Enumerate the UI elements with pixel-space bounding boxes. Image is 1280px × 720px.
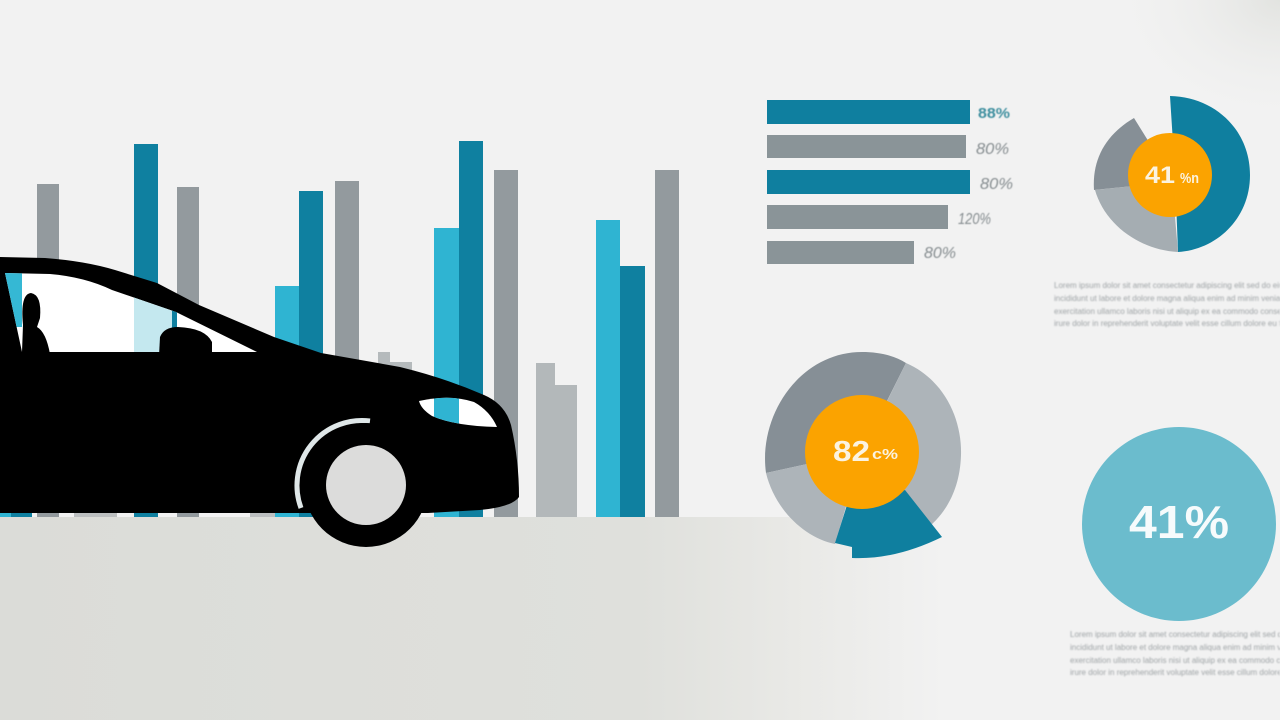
donut chart: centre 82%: 82 bbox=[833, 436, 870, 468]
car silhouette bbox=[0, 257, 519, 547]
bar 2: 80% bbox=[976, 141, 1009, 158]
side window bbox=[5, 273, 263, 355]
tyre bbox=[304, 423, 428, 547]
wheel arch highlight bbox=[297, 421, 370, 508]
horizontal bar chart bbox=[767, 100, 1013, 264]
text block: lower paragraph bbox=[1070, 630, 1280, 677]
driver silhouette bbox=[22, 293, 50, 354]
donut chart: top right 41%: 41 bbox=[1145, 162, 1175, 189]
bar chart: vertical bars bbox=[0, 141, 679, 517]
text block: upper paragraph bbox=[1054, 281, 1280, 328]
stat circle: 41% bbox=[1082, 427, 1276, 621]
bar 3 bbox=[767, 170, 1013, 194]
window tint bbox=[5, 273, 177, 352]
lower door bbox=[0, 352, 300, 362]
donut chart: centre 82% bbox=[765, 352, 961, 558]
background corner shade bbox=[1100, 0, 1280, 130]
seat headrest bbox=[159, 327, 212, 356]
car body bbox=[0, 257, 519, 513]
headlight bbox=[419, 398, 497, 427]
donut chart: top right 41% bbox=[1094, 96, 1250, 252]
hub bbox=[326, 445, 406, 525]
bar 2 bbox=[767, 135, 1009, 158]
headlight reflection bbox=[434, 398, 459, 424]
ground band bbox=[0, 517, 1280, 720]
bar 1 bbox=[767, 100, 1010, 124]
bar 4 bbox=[767, 205, 991, 229]
donut chart: top right 41%: %n bbox=[1180, 170, 1199, 187]
bar 5 bbox=[767, 241, 956, 264]
bar 1: 88% bbox=[978, 105, 1010, 122]
bar 5: 80% bbox=[924, 245, 956, 262]
bar 4: 120% bbox=[958, 211, 991, 228]
bar 3: 80% bbox=[980, 176, 1013, 193]
stat circle: 41%: 41% bbox=[1129, 496, 1229, 548]
donut chart: centre 82%: c% bbox=[872, 446, 898, 463]
